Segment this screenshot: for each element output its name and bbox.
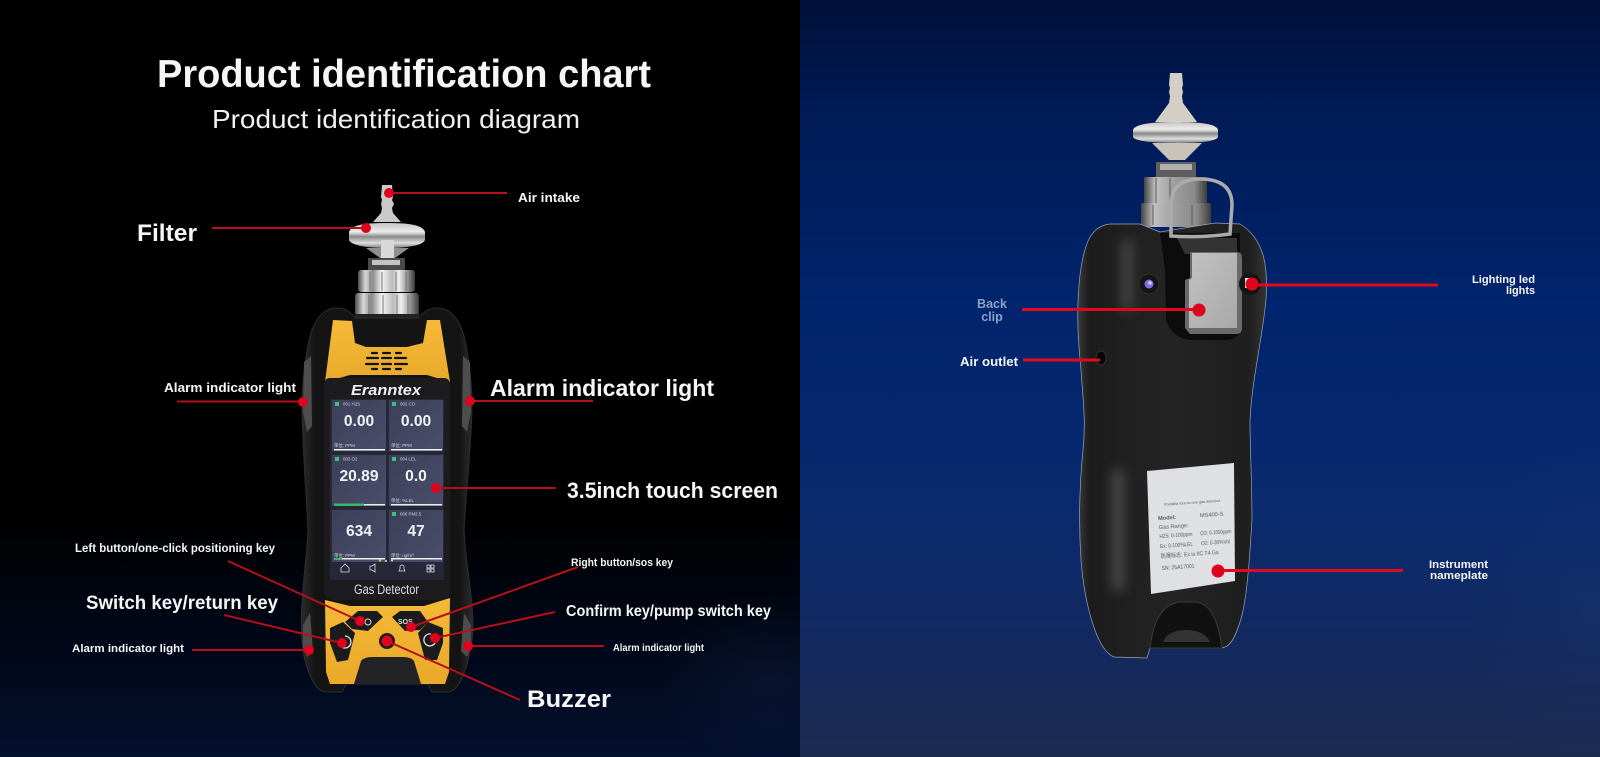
callout: alarm indicator light upper right: Alarm indicator light <box>490 375 714 401</box>
callout: instrument nameplate: nameplate <box>1430 570 1488 582</box>
reading cell LEL <box>389 455 443 506</box>
reading cell PM2.5: 006 PM2.5 <box>400 512 422 516</box>
back clip plate <box>1185 252 1242 334</box>
callout: alarm indicator light lower left <box>72 643 314 655</box>
reading cell CO <box>389 400 443 451</box>
callout: confirm key <box>430 603 771 643</box>
callout: buzzer: Buzzer <box>527 686 611 713</box>
speaker grille <box>366 353 407 369</box>
instrument nameplate: CO: 0-1000ppm <box>1200 529 1232 537</box>
reading cell LEL: 单位: %LEL <box>391 497 414 504</box>
keypad buttons <box>330 611 443 662</box>
instrument nameplate: MS400-S <box>1200 512 1224 519</box>
callout: right button: Right button/sos key <box>571 557 674 569</box>
key glyphs <box>339 619 435 648</box>
callout: alarm indicator light upper left <box>164 380 308 407</box>
reading cell H2S <box>332 400 386 451</box>
callout: switch key <box>86 593 347 648</box>
clip recess <box>1160 233 1240 340</box>
instrument nameplate: SN: 25A17001 <box>1161 564 1195 572</box>
instrument nameplate: Portable four-in-one gas detector <box>1164 498 1221 507</box>
callout: lighting led lights <box>1246 274 1535 297</box>
camera lens <box>1139 274 1159 294</box>
callout: air intake: Air intake <box>518 190 580 205</box>
touch screen <box>330 399 444 580</box>
reading cell H2S: 单位: PPM <box>334 442 355 449</box>
callout: alarm indicator light upper left: Alarm indicator light <box>164 380 297 395</box>
reading cell CO: 0.00 <box>401 413 431 430</box>
callout: left button <box>75 543 365 626</box>
instrument nameplate: Gas Range: <box>1159 523 1189 531</box>
brand name: Eranntex <box>351 383 422 399</box>
callout: alarm indicator light lower right: Alarm indicator light <box>613 642 704 654</box>
model caption: Gas Detector <box>354 582 419 597</box>
callout: left button: Left button/one-click positioning key <box>75 543 276 555</box>
callout: right button <box>406 557 674 632</box>
callout: instrument nameplate: Instrument <box>1429 559 1488 571</box>
air outlet hole <box>1096 351 1106 365</box>
callout: lighting led lights: Lighting led <box>1472 274 1535 286</box>
shell highlights <box>1112 240 1132 590</box>
reading cell PM2.5: 单位: ug/m³ <box>391 552 414 559</box>
instrument nameplate: Ex: 0-100%LEL <box>1160 542 1193 550</box>
callout: filter <box>137 220 371 247</box>
panel: right background <box>800 0 1600 757</box>
callout: filter: Filter <box>137 220 197 247</box>
instrument nameplate: O2: 0-30%Vol <box>1201 539 1230 547</box>
yellow lower cover <box>325 598 450 684</box>
reading cell CO: 单位: PPM <box>391 442 412 449</box>
reading cell O2: 003 O2 <box>343 456 358 462</box>
metal connector <box>1141 162 1211 227</box>
instrument nameplate: H2S: 0-100ppm <box>1159 532 1193 540</box>
callout: air outlet: Air outlet <box>960 355 1019 369</box>
callout: back clip <box>977 297 1206 324</box>
filter disc <box>1133 122 1218 143</box>
reading cell CO2 <box>332 510 386 562</box>
filter lower cone <box>1152 143 1202 160</box>
callout: buzzer <box>382 636 611 713</box>
led light <box>1239 273 1261 295</box>
device back shell <box>1078 223 1267 658</box>
reading cell H2S: 0.00 <box>344 413 374 430</box>
callout: instrument nameplate <box>1212 559 1488 582</box>
side grip strips <box>303 356 471 657</box>
reading cell PM2.5 <box>389 510 443 562</box>
filter disc <box>349 223 425 259</box>
callout: back clip: Back <box>977 297 1007 311</box>
instrument nameplate: Model: <box>1158 515 1176 522</box>
battery dock rear <box>1150 602 1222 648</box>
reading cell O2: 20.89 <box>339 468 379 485</box>
callout: touch screen: 3.5inch touch screen <box>567 478 778 503</box>
callout: lighting led lights: lights <box>1506 285 1535 297</box>
callout: confirm key: Confirm key/pump switch key <box>566 603 771 620</box>
d-ring <box>1171 179 1232 237</box>
callout: air outlet <box>960 355 1100 369</box>
title: Product identification chart <box>157 53 651 96</box>
status dots <box>379 559 393 562</box>
product: front view of gas detector <box>301 185 473 692</box>
device body <box>301 308 473 692</box>
reading cell H2S: 001 H2S <box>343 402 360 406</box>
callout: alarm indicator light lower right <box>463 641 704 654</box>
reading cell CO2: 634 <box>346 523 372 540</box>
yellow top cover <box>325 320 450 382</box>
callout: air intake <box>384 188 580 205</box>
instrument nameplate: 防爆标志: Ex ia IIC T4 Ga <box>1160 548 1220 560</box>
reading cell PM2.5: 47 <box>407 523 425 540</box>
clip bracket <box>1177 238 1237 254</box>
instrument nameplate <box>1147 463 1235 594</box>
air intake barb <box>373 185 401 222</box>
reading cell CO2: 单位: PPM <box>334 552 355 559</box>
callout: switch key: Switch key/return key <box>86 593 278 614</box>
metal connector collar <box>355 258 419 320</box>
subtitle: Product identification diagram <box>212 104 580 134</box>
panel: left background <box>0 0 880 757</box>
callout: back clip: clip <box>981 310 1003 324</box>
air intake barb <box>1155 73 1197 122</box>
reading cell CO: 002 CO <box>400 402 416 406</box>
reading cell LEL: 0.0 <box>405 468 427 485</box>
reading cell LEL: 004 LEL <box>400 456 417 462</box>
reading cell O2 <box>332 455 386 506</box>
bottom navigation bar <box>341 564 434 572</box>
product: rear view of gas detector <box>1078 73 1267 658</box>
key glyphs: SOS <box>398 619 413 626</box>
callout: alarm indicator light lower left: Alarm indicator light <box>72 643 184 655</box>
battery dock <box>354 657 421 684</box>
screen bezel <box>324 378 450 600</box>
callout: touch screen <box>431 478 778 503</box>
